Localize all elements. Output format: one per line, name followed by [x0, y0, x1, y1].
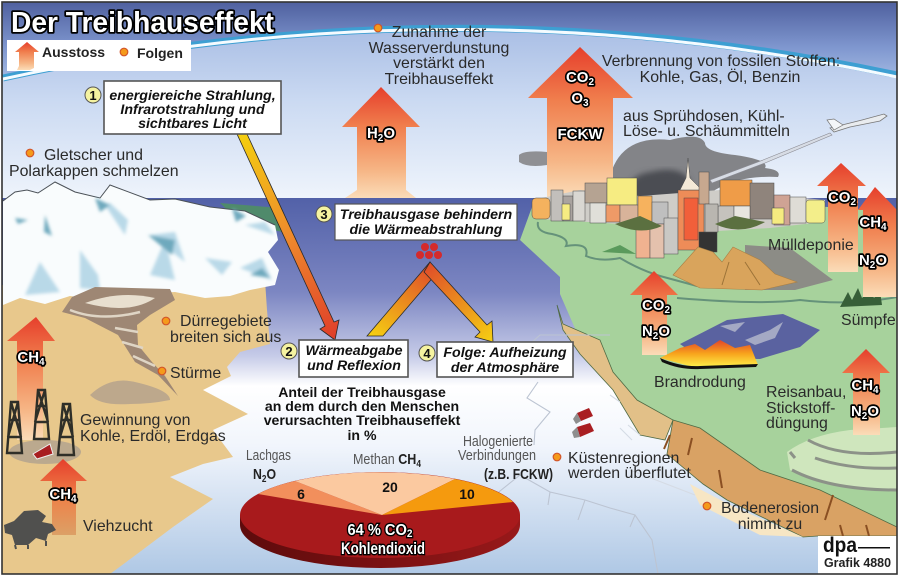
- label: water evaporation: Treibhauseffekt: [385, 71, 494, 88]
- decoration: cracks: [495, 335, 695, 574]
- label: droughts: Dürregebiete: [180, 313, 272, 330]
- region: right land green: [520, 200, 897, 527]
- arrow: methane from livestock: CH: [49, 486, 71, 503]
- arrow: CO2 right: [817, 163, 866, 272]
- label: spray cans: Löse- u. Schäummitteln: [623, 123, 790, 140]
- pie label: methane: Methan CH: [353, 451, 420, 468]
- chart heading: Anteil der Treibhausgase: [278, 384, 446, 400]
- label: glaciers: Polarkappen schmelzen: [9, 163, 179, 180]
- pie label: halogenated compounds: Halogenierte: [463, 433, 533, 450]
- chart heading: verursachten Treibhauseffekt: [264, 412, 461, 428]
- arrow: methane from extraction: [7, 317, 55, 440]
- pie label: methane: 4: [416, 459, 421, 470]
- label: livestock: Viehzucht: [83, 518, 153, 535]
- arrow: CH4 N2O rice: CH: [851, 377, 873, 394]
- pie chart: 10: [459, 486, 475, 502]
- step 3 box: [316, 204, 517, 240]
- label: rice and fertiliser: Reisanbau,: [766, 384, 846, 401]
- step 3 box: die Wärmeabstrahlung: [350, 222, 503, 238]
- arrow: CO2 N2O slash-and-burn: CO: [642, 297, 664, 314]
- illustration: contrail and plane: [710, 114, 887, 183]
- arrow: CH4 and N2O swamps: 4: [881, 222, 887, 233]
- label: extraction: Gewinnung von: [80, 412, 190, 429]
- label: droughts: breiten sich aus: [170, 329, 281, 346]
- arrow: CO2 O3 FCKW: [528, 47, 633, 198]
- arrow: water vapour H2O: [342, 87, 420, 198]
- title: Der Treibhauseffekt: [11, 7, 274, 39]
- arrow: CH4 and N2O swamps: [858, 187, 897, 297]
- label: fossil fuels: [602, 53, 840, 86]
- pie label: halogenated compounds: Verbindungen: [458, 447, 536, 464]
- label: water evaporation: Wasserverdunstung: [369, 40, 509, 57]
- arrow: CO2 O3 FCKW: O: [571, 90, 583, 107]
- step 1 box: 1: [89, 88, 97, 103]
- label: rice and fertiliser: düngung: [766, 415, 828, 432]
- pie label: nitrous oxide: Lachgas: [246, 447, 291, 464]
- region: coast strips: [557, 305, 897, 537]
- label: rice and fertiliser: [766, 384, 846, 432]
- label: swamps: Sümpfe: [841, 312, 896, 329]
- step 2 box: 2: [285, 344, 293, 359]
- arrow: CH4 N2O rice: O: [867, 403, 879, 420]
- label: droughts: [162, 313, 281, 346]
- illustration: landfill: [602, 245, 833, 290]
- arrow: CO2 O3 FCKW: CO: [566, 69, 588, 86]
- chart heading: [264, 384, 461, 443]
- label: glaciers: [9, 147, 179, 180]
- pie label: nitrous oxide: O: [266, 466, 276, 483]
- label: water evaporation: Zunahme der: [392, 24, 487, 41]
- arrow: water vapour H2O: O: [383, 125, 395, 142]
- arrow: methane from extraction: 4: [39, 357, 45, 368]
- step 2 box: Wärmeabgabe: [306, 343, 403, 359]
- arrow: CH4 and N2O swamps: CH: [859, 214, 881, 231]
- credit: dpa: [818, 534, 897, 574]
- illustration: swamp grass: [840, 288, 882, 307]
- label: storms: Stürme: [170, 365, 221, 382]
- pie chart: 6: [297, 486, 305, 502]
- pie label: halogenated compounds: [458, 433, 553, 483]
- label: soil erosion: Bodenerosion: [721, 500, 819, 517]
- illustration: oil derricks: [7, 390, 81, 464]
- step 3 box: 3: [320, 207, 328, 222]
- label: water evaporation: [369, 24, 509, 88]
- illustration: dry puddle: [90, 381, 170, 404]
- label: water evaporation: verstärkt den: [393, 55, 485, 72]
- arrow: CH4 N2O rice: 4: [873, 385, 879, 396]
- label: rice and fertiliser: Stickstoff-: [766, 400, 835, 417]
- illustration: city skyline: [532, 158, 825, 258]
- pie label: halogenated compounds: (z.B. FCKW): [484, 466, 553, 483]
- credit: dpa: dpa: [823, 534, 857, 557]
- arrow: CO2 O3 FCKW: FCKW: [558, 126, 603, 143]
- step 1 box: sichtbares Licht: [138, 116, 248, 132]
- label: extraction: [80, 412, 226, 445]
- step 1 box: [85, 81, 281, 134]
- pie chart: Kohlendioxid: [341, 539, 425, 558]
- step 4 box: Folge: Aufheizung: [443, 345, 567, 361]
- arrow: water vapour H2O: H: [367, 125, 378, 142]
- illustration: river: [538, 222, 897, 302]
- arrow: CO2 right: CO: [828, 189, 850, 206]
- illustration: smoke cloud: [519, 137, 779, 205]
- arrow: CO2 right: 2: [850, 197, 856, 208]
- label: spray cans: aus Sprühdosen, Kühl-: [623, 108, 785, 125]
- arrow: CO2 N2O slash-and-burn: N: [642, 323, 653, 340]
- step 1 box: energiereiche Strahlung,: [109, 88, 276, 104]
- label: coastal flooding: Küstenregionen: [568, 450, 679, 467]
- step 2 box: und Reflexion: [307, 358, 401, 374]
- illustration: tornado: [62, 287, 178, 396]
- arrow: CH4 N2O rice: [842, 349, 890, 435]
- label: coastal flooding: [553, 450, 691, 482]
- arrow: heat chevron: [367, 262, 493, 342]
- region: left land with sand: [2, 280, 270, 574]
- pie label: nitrous oxide: [246, 447, 291, 485]
- icon: legend arrow: [15, 42, 39, 70]
- label: soil erosion: [703, 500, 819, 533]
- step 4 box: der Atmosphäre: [451, 360, 559, 376]
- label: fossil fuels: Verbrennung von fossilen Stoffen:: [602, 53, 840, 70]
- step 4 box: 4: [423, 346, 431, 361]
- label: landfill: Mülldeponie: [768, 237, 854, 254]
- legend: Folgen: [137, 45, 183, 61]
- pie label: nitrous oxide: 2: [262, 474, 267, 485]
- arrow: CH4 and N2O swamps: N: [859, 252, 870, 269]
- step 4 box: [419, 342, 573, 377]
- label: fossil fuels: Kohle, Gas, Öl, Benzin: [640, 68, 800, 86]
- label: soil erosion: nimmt zu: [738, 516, 802, 533]
- label: spray cans: [623, 108, 790, 140]
- label: slash and burn: Brandrodung: [654, 374, 746, 391]
- credit: dpa: Grafik 4880: [824, 555, 891, 570]
- arrow: CO2 O3 FCKW: 3: [583, 98, 589, 109]
- arrow: CO2 N2O slash-and-burn: [630, 271, 678, 355]
- pie chart: 20: [382, 479, 398, 495]
- illustration: glacier mountains: [3, 182, 282, 305]
- illustration: flooded houses: [572, 408, 594, 438]
- chart heading: an dem durch den Menschen: [265, 398, 459, 414]
- arrow: CH4 N2O rice: 2: [862, 411, 868, 422]
- pie chart: 2: [407, 528, 412, 540]
- arrow: incoming radiation: [237, 134, 339, 340]
- arrow: CO2 O3 FCKW: 2: [588, 77, 594, 88]
- illustration: rice terraces: [787, 427, 897, 490]
- background: sea: [2, 198, 897, 574]
- pie chart: [240, 472, 520, 568]
- arrow: CO2 N2O slash-and-burn: O: [658, 323, 670, 340]
- legend: Ausstoss: [42, 44, 105, 60]
- pie label: nitrous oxide: N: [253, 466, 264, 483]
- arrow: CO2 N2O slash-and-burn: 2: [664, 305, 670, 316]
- label: coastal flooding: werden überflutet: [567, 465, 691, 482]
- pie chart: 64 % CO: [348, 522, 412, 539]
- arrow: CH4 and N2O swamps: 2: [870, 260, 876, 271]
- chart heading: in %: [348, 427, 377, 443]
- arrow: CO2 N2O slash-and-burn: 2: [653, 331, 659, 342]
- step 3 box: Treibhausgase behindern: [340, 207, 513, 223]
- arrow: water vapour H2O: 2: [378, 133, 384, 144]
- arrow: CH4 N2O rice: N: [851, 403, 862, 420]
- label: extraction: Kohle, Erdöl, Erdgas: [80, 428, 226, 445]
- arrow: methane from livestock: [40, 459, 87, 535]
- arrow: methane from livestock: 4: [71, 494, 77, 505]
- illustration: cattle herd: [4, 510, 56, 549]
- step 2 box: [281, 340, 408, 377]
- legend: [7, 40, 191, 71]
- illustration: forest burning: [660, 314, 820, 369]
- step 1 box: Infrarotstrahlung und: [120, 102, 265, 118]
- label: glaciers: Gletscher und: [44, 147, 143, 164]
- arrow: CH4 and N2O swamps: O: [875, 252, 887, 269]
- greenhouse gas molecules: [416, 243, 442, 259]
- arrow: methane from extraction: CH: [17, 349, 39, 366]
